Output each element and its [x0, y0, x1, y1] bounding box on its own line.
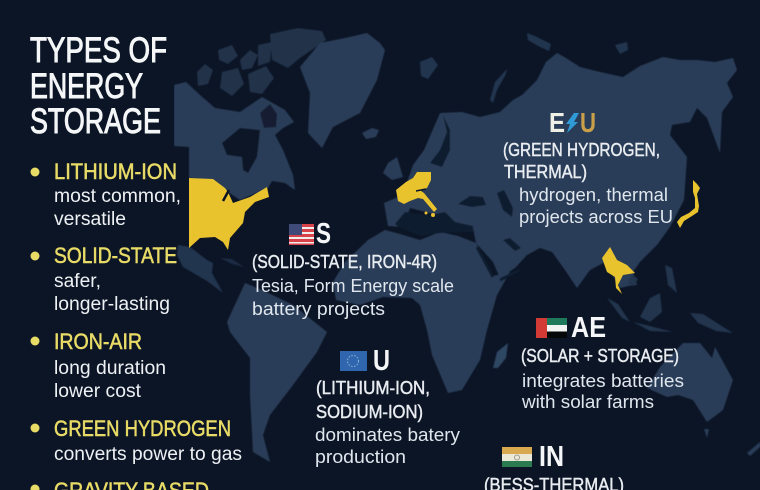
Arctic islands — [420, 33, 628, 103]
storage type: lithium-ion: most common, — [54, 186, 181, 207]
callout: US — [252, 218, 454, 319]
callout: EU hydrogen: THERMAL) — [504, 161, 587, 182]
Madagascar — [493, 343, 508, 368]
storage type: solid-state: longer-lasting — [54, 294, 170, 315]
storage type: green hydrogen: GREEN HYDROGEN — [54, 416, 231, 441]
storage type: lithium-ion: LITHIUM-ION — [54, 159, 177, 184]
South America — [227, 283, 327, 462]
Iceland — [362, 128, 379, 139]
callout: India: IN — [539, 441, 564, 473]
storage type: solid-state — [30, 243, 177, 315]
callout: EU batteries: (LITHIUM-ION, — [316, 377, 430, 398]
storage type: iron-air: IRON-AIR — [54, 329, 142, 354]
storage type: solid-state: SOLID-STATE — [54, 243, 177, 268]
icon: US flag — [289, 224, 314, 245]
highlight: United States — [189, 178, 269, 250]
storage type: lithium-ion — [30, 159, 181, 230]
Tasmania and New Zealand — [704, 429, 760, 456]
Arctic archipelago — [197, 28, 326, 96]
callout: EU batteries: dominates batery — [315, 424, 461, 445]
title: ENERGY — [30, 67, 143, 106]
storage type: lithium-ion: versatile — [54, 209, 126, 230]
storage type: green hydrogen — [30, 416, 242, 465]
callout: US: battery projects — [252, 298, 385, 319]
inland seas — [395, 115, 521, 280]
callout: India — [484, 441, 624, 490]
icon: EU flag — [340, 351, 367, 371]
callout: UAE: (SOLAR + STORAGE) — [521, 345, 679, 366]
highlight: Japan — [677, 180, 700, 228]
callout: UAE: AE — [571, 312, 606, 344]
Greenland — [300, 33, 385, 148]
callout: EU hydrogen: (GREEN HYDROGEN, — [503, 139, 660, 160]
icon: India flag — [502, 447, 532, 467]
Africa land — [333, 230, 510, 393]
callout: EU hydrogen — [503, 107, 673, 227]
United Kingdom — [383, 157, 403, 180]
callout: EU batteries: U — [373, 345, 390, 377]
heading with bolt icon: U — [580, 107, 596, 138]
callout: EU batteries: SODIUM-ION) — [316, 401, 423, 422]
icon: UAE flag — [536, 318, 567, 338]
Australia — [647, 343, 733, 422]
callout: UAE: integrates batteries — [522, 370, 684, 391]
heading with bolt icon: E — [549, 107, 565, 138]
title: TYPES OF — [30, 31, 167, 70]
storage type: iron-air — [30, 329, 166, 402]
callout: US: S — [316, 218, 331, 250]
highlight: Southeast Asia — [602, 247, 635, 294]
Southeast Asia islands — [607, 265, 733, 333]
storage type: iron-air: lower cost — [54, 381, 142, 402]
callout: EU hydrogen: hydrogen, thermal — [519, 184, 668, 205]
callout: UAE — [521, 312, 684, 412]
title: STORAGE — [30, 102, 161, 141]
heading with bolt icon — [549, 107, 596, 138]
storage type: iron-air: long duration — [54, 358, 166, 379]
callout: EU hydrogen: projects across EU — [519, 206, 673, 227]
highlight: Western Europe — [396, 172, 437, 217]
callout: US: Tesia, Form Energy scale — [252, 275, 454, 296]
North America land — [174, 82, 295, 293]
callout: EU batteries: production — [315, 446, 406, 467]
world map — [174, 28, 760, 462]
title — [30, 31, 167, 141]
storage type: green hydrogen: converts power to gas — [54, 444, 242, 465]
callout: UAE: with solar farms — [521, 391, 654, 412]
Eurasia land — [384, 53, 737, 288]
Foxe Basin — [260, 104, 277, 128]
Hudson Bay — [222, 128, 260, 173]
callout: EU batteries — [315, 345, 461, 467]
callout: US: (SOLID-STATE, IRON-4R) — [252, 251, 437, 272]
storage type: solid-state: safer, — [54, 271, 101, 292]
